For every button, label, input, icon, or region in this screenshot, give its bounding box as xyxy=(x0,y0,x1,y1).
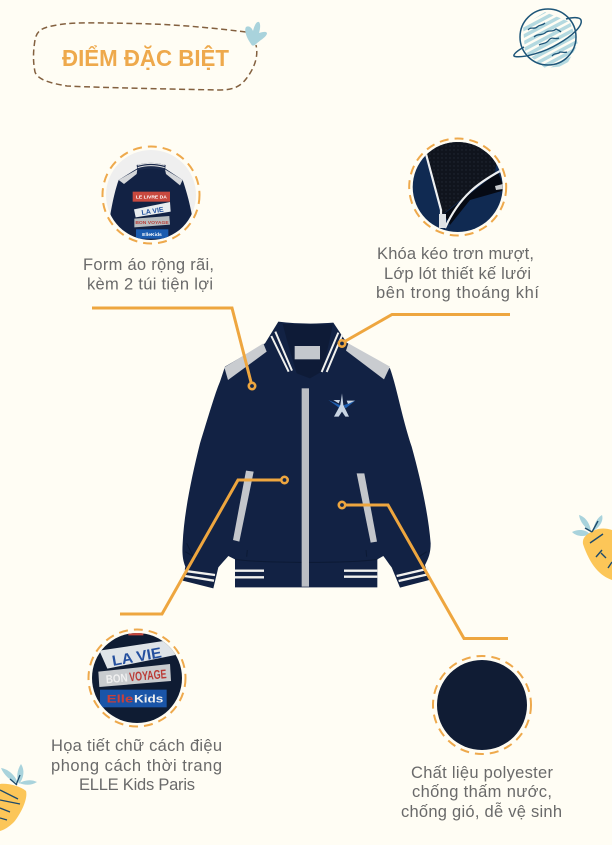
neck lining xyxy=(283,324,333,378)
photo: printed labels xyxy=(92,633,182,723)
caption: phong cách thời trang xyxy=(51,757,222,775)
photo: printed labels: VOYAGE xyxy=(129,667,167,684)
photo: printed labels: BON xyxy=(105,671,128,686)
jacket body xyxy=(182,322,431,588)
caption: Form áo rộng rãi, xyxy=(83,256,214,274)
title text: ĐIỂM ĐẶC BIỆT xyxy=(62,44,229,71)
photo: jacket back: BON VOYAGE xyxy=(135,220,169,226)
caption: chống gió, dễ vệ sinh xyxy=(401,802,562,821)
callout: pattern xyxy=(51,630,222,794)
caption: Lớp lót thiết kế lưới xyxy=(384,265,531,283)
icon: carrot right xyxy=(572,515,612,580)
leader line: zipper xyxy=(339,314,510,347)
photo: printed labels: Kids xyxy=(134,694,163,706)
icon: carrot left xyxy=(0,764,37,831)
photo: jacket back xyxy=(106,150,196,240)
leader line: material xyxy=(339,502,508,638)
leader line: pattern xyxy=(120,477,288,614)
photo: printed labels: LA VIE xyxy=(111,645,163,670)
caption: chống thấm nước, xyxy=(412,783,552,801)
main zipper xyxy=(302,388,309,587)
caption: Chất liệu polyester xyxy=(411,764,554,782)
title badge xyxy=(34,22,267,90)
caption: kèm 2 túi tiện lợi xyxy=(87,276,213,294)
logo: star and Eiffel tower xyxy=(328,393,355,417)
callout: form xyxy=(83,145,214,294)
shoulder panel left xyxy=(224,343,267,380)
photo: jacket back: LE LIVRE DA xyxy=(136,195,167,201)
right pocket zipper xyxy=(357,473,377,543)
dashed ring xyxy=(88,630,186,726)
caption: Khóa kéo trơn mượt, xyxy=(377,245,534,263)
icon: planet xyxy=(514,9,581,68)
dashed ring xyxy=(102,146,200,244)
callout: zipper xyxy=(376,138,539,302)
sleeve seams and shading xyxy=(185,543,427,562)
shoulder panel right xyxy=(346,343,390,379)
caption: Họa tiết chữ cách điệu xyxy=(51,737,222,755)
dashed ring xyxy=(409,138,506,236)
dashed title frame xyxy=(34,23,257,90)
dashed ring xyxy=(433,656,531,754)
caption: bên trong thoáng khí xyxy=(376,284,539,302)
jacket illustration xyxy=(182,322,431,588)
left pocket zipper xyxy=(233,471,254,542)
leader line: form xyxy=(92,308,255,389)
callout: material xyxy=(401,656,562,821)
photo: jacket back: LA VIE xyxy=(141,207,165,217)
caption: ELLE Kids Paris xyxy=(79,776,195,794)
neck label xyxy=(295,346,320,359)
photo: zipper and mesh lining xyxy=(412,142,503,232)
collar stripes xyxy=(271,332,342,372)
photo: fabric swatch xyxy=(437,660,527,750)
icon: blue leaf xyxy=(245,22,267,46)
photo: printed labels: Elle xyxy=(107,694,133,706)
hem and cuff stripes xyxy=(183,569,429,581)
photo: jacket back: ElleKids xyxy=(142,232,162,238)
